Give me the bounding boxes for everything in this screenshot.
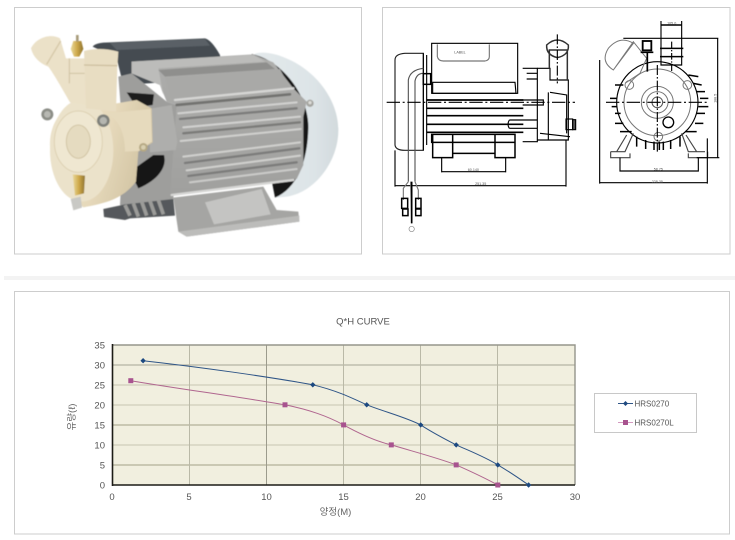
- plot area: [112, 345, 575, 485]
- y axis labels: [94, 340, 105, 492]
- x axis labels: 0: [109, 492, 115, 503]
- series: HRS0270L: [128, 378, 500, 488]
- x axis labels: [109, 492, 580, 503]
- drawing labels: LABEL: [454, 51, 466, 55]
- wires: [403, 182, 418, 223]
- drawing labels: 228.35: [652, 180, 663, 184]
- y axis labels: 0: [100, 480, 105, 492]
- y axis title: 유량(ℓ): [66, 404, 78, 430]
- fan cover black ring: [252, 54, 308, 198]
- panel: product photo: [14, 8, 362, 254]
- drawing labels: 251.35: [475, 182, 486, 186]
- drawing labels: 58.75: [654, 168, 663, 172]
- y axis labels: 15: [94, 420, 105, 432]
- legend: [594, 394, 696, 432]
- legend: HRS0270: [634, 400, 670, 408]
- y axis labels: 35: [94, 340, 105, 352]
- x axis labels: 5: [186, 492, 192, 503]
- top fins: [132, 55, 265, 95]
- capacitor box: [93, 38, 223, 85]
- outlet tube: [84, 49, 118, 112]
- x axis title: 양정(M): [320, 507, 351, 518]
- fan cover: [255, 53, 338, 198]
- motor bracket: [118, 73, 177, 210]
- x axis labels: 10: [261, 492, 272, 503]
- side inlet: [31, 36, 86, 105]
- drawing labels: 188.5: [714, 94, 718, 103]
- dimension lines: [600, 38, 719, 184]
- panel: Q*H curve: [14, 292, 730, 534]
- divider band: [4, 276, 735, 280]
- x axis labels: 30: [570, 492, 580, 503]
- drawing labels: 60.140: [468, 168, 479, 172]
- y axis labels: 20: [94, 400, 105, 412]
- brass fitting top: [71, 41, 83, 57]
- drawing: side and front elevation: [387, 21, 719, 232]
- side view: [387, 34, 576, 232]
- dimension lines: [395, 140, 566, 187]
- foot: [173, 187, 299, 237]
- y axis labels: 25: [94, 380, 105, 392]
- y axis labels: 30: [94, 360, 105, 372]
- pump body: [50, 100, 153, 207]
- drawing labels: 105.0: [667, 22, 676, 26]
- x axis labels: 25: [492, 492, 503, 503]
- legend: HRS0270L: [634, 418, 674, 428]
- y axis labels: 10: [94, 440, 105, 452]
- panel: technical drawing: [382, 8, 730, 254]
- bolts: [41, 108, 53, 120]
- motor body: [132, 54, 307, 196]
- neck collar: [148, 105, 177, 152]
- drawing labels: [454, 22, 718, 186]
- chart title: Q*H CURVE: [336, 316, 390, 328]
- brass plug: [73, 174, 85, 196]
- front view: [600, 21, 719, 184]
- line chart: [66, 340, 580, 518]
- x axis labels: 20: [415, 492, 426, 503]
- photo: water pump: [31, 35, 338, 237]
- y axis labels: 5: [100, 460, 105, 472]
- series: HRS0270: [140, 358, 531, 488]
- side fins: [172, 88, 301, 195]
- x axis labels: 15: [338, 492, 349, 503]
- lower fins and dark foot: [103, 199, 175, 220]
